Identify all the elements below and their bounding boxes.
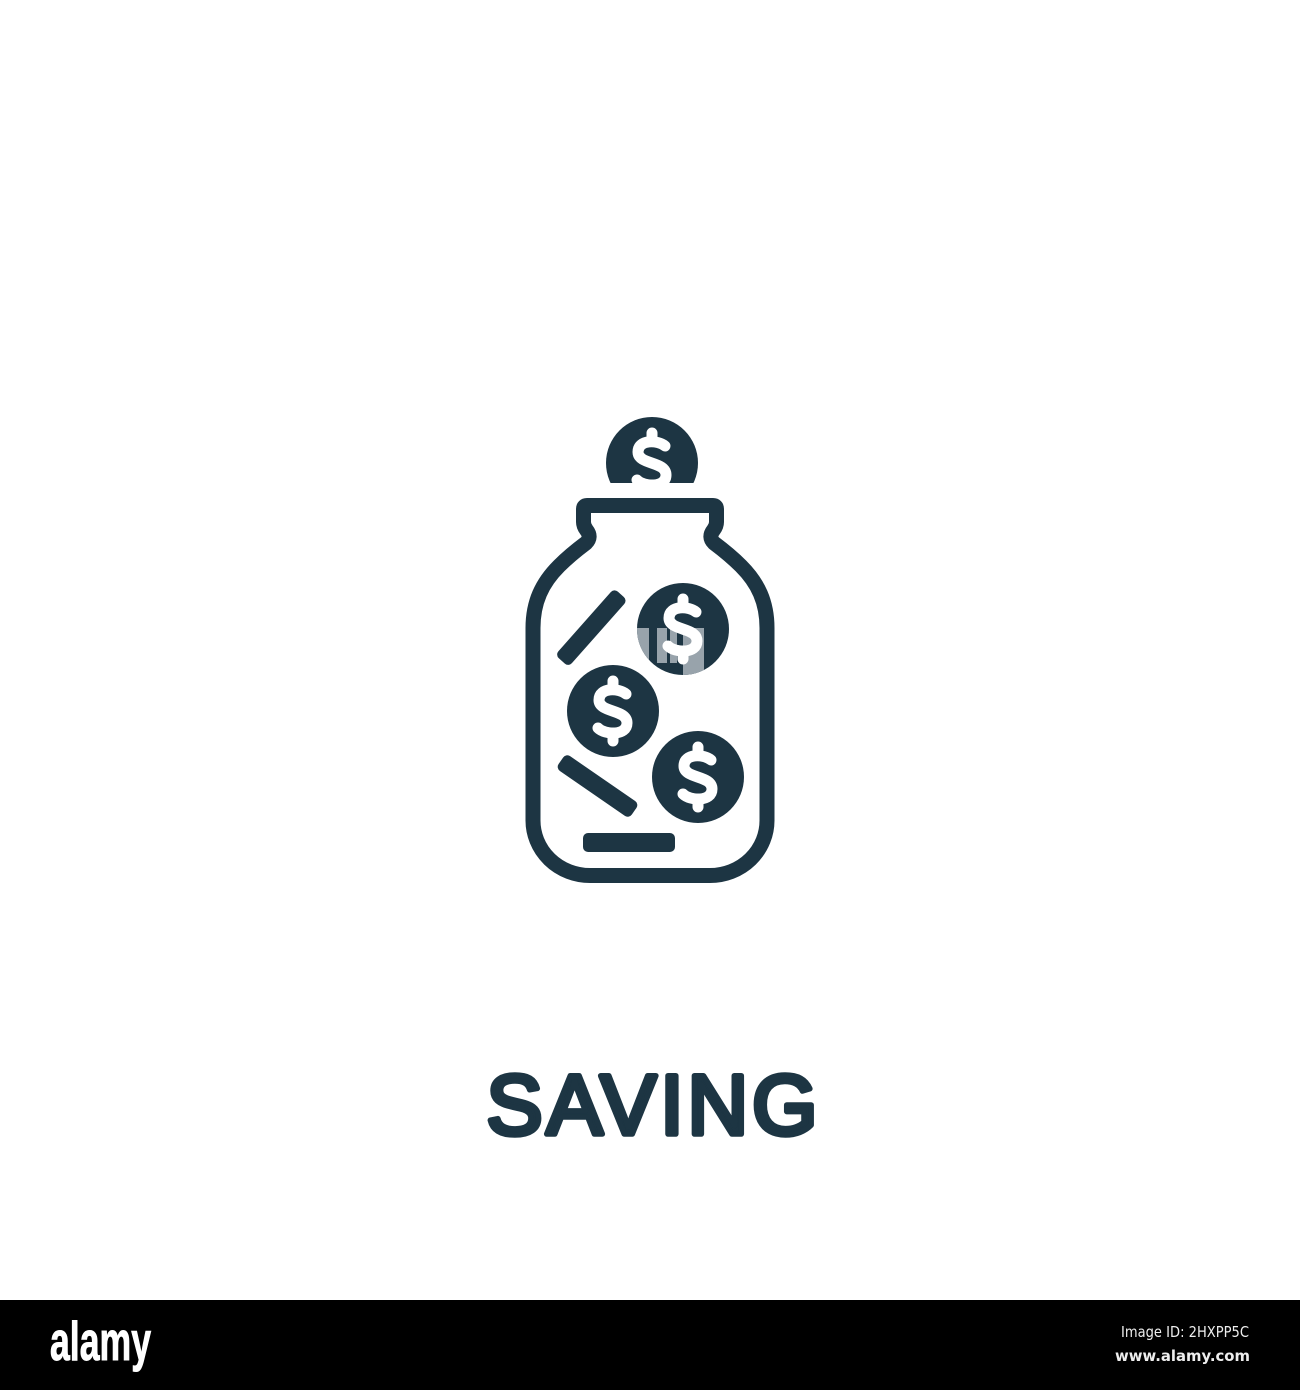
footer logo: alamy	[50, 1310, 151, 1372]
icon: jar outline	[533, 506, 767, 876]
icon: dollar coin upper right	[637, 583, 729, 676]
watermark fragment over coin	[637, 628, 704, 676]
website: www.alamy.com	[1115, 1347, 1250, 1365]
image id: Image ID: 2HXPP5C	[1121, 1323, 1249, 1341]
icon: coin dropping into the jar	[606, 417, 698, 483]
icon: dollar coin lower right	[652, 731, 744, 823]
icon: savings jar with coins	[533, 417, 767, 876]
footer bar	[0, 1300, 1300, 1390]
icon: dollar coin centre	[567, 665, 659, 757]
icon: flat coin edge at jar bottom	[583, 833, 675, 852]
icon: tilted coin edge upper left	[555, 588, 628, 667]
icon: tilted coin edge lower left	[556, 753, 639, 819]
infographic canvas	[0, 417, 1300, 1390]
title: SAVING	[486, 1058, 818, 1152]
